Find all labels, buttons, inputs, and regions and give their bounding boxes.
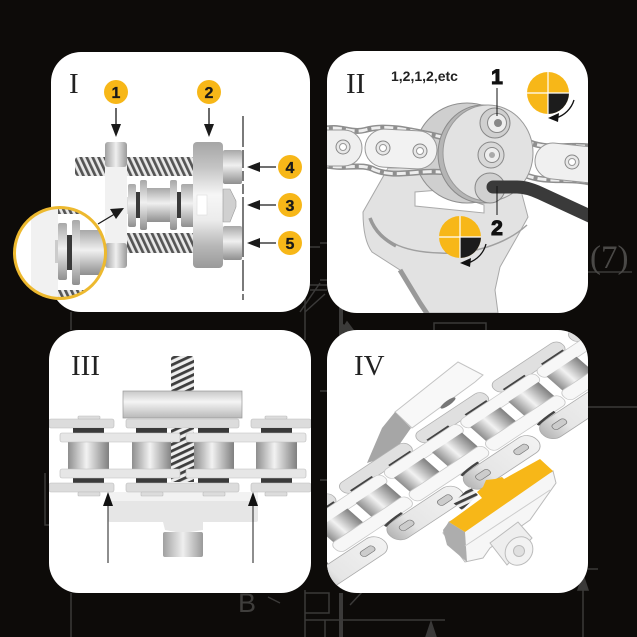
lower outer plates	[327, 392, 588, 586]
upper bolt	[171, 356, 194, 392]
tool disc	[438, 105, 533, 203]
faint label: (7): (7)	[590, 240, 628, 276]
chain	[327, 332, 588, 586]
yellow face	[449, 459, 553, 532]
thread visible	[453, 487, 478, 510]
panel: step I	[51, 52, 310, 312]
badge 1: 1	[112, 85, 121, 102]
panel: step IV	[327, 330, 588, 593]
numeral I: I	[69, 68, 79, 100]
badge 1	[104, 80, 128, 104]
socket bolts	[475, 108, 510, 203]
panel: step II	[327, 51, 588, 313]
badge 2: 2	[205, 85, 214, 102]
centre thread	[171, 428, 194, 482]
wrench	[363, 168, 528, 313]
top disc	[123, 391, 242, 418]
rollers	[318, 357, 592, 542]
badge 5: 5	[286, 236, 295, 253]
bolt label 1	[491, 66, 503, 116]
arrows	[103, 492, 258, 563]
flange 2	[193, 142, 223, 268]
badge 4	[278, 155, 302, 179]
back clamp	[418, 102, 482, 204]
pressing plate	[367, 362, 483, 463]
threaded rods	[75, 157, 195, 253]
badge 3	[278, 193, 302, 217]
dark crescents	[313, 350, 563, 516]
numeral IV: IV	[354, 350, 385, 382]
inner plates	[60, 433, 306, 478]
dashed reference line	[242, 116, 244, 300]
anvil block	[443, 459, 556, 571]
magnifier callout	[14, 207, 110, 300]
center spacer assembly	[127, 180, 196, 230]
wrench jaw opening	[415, 190, 484, 213]
bolt label 2	[491, 186, 503, 240]
nut 1	[105, 142, 127, 268]
faint label: B: B	[238, 588, 256, 618]
chain left	[300, 128, 442, 174]
upper outer plates	[327, 332, 582, 506]
dark bushings	[73, 428, 292, 483]
hex key	[493, 187, 592, 217]
dark crescents lower	[327, 410, 556, 564]
quarter-turn icon upper	[527, 72, 574, 122]
sequence label: 1,2,1,2,etc	[391, 68, 458, 84]
outer plates top	[49, 416, 311, 428]
pins	[360, 418, 568, 557]
badge 4: 4	[286, 160, 295, 177]
panel: step III	[49, 330, 311, 593]
caps and centre bolt	[223, 150, 242, 260]
numeral III: III	[71, 350, 100, 382]
badge 2	[197, 80, 221, 104]
badge 3: 3	[286, 198, 295, 215]
bolt label 2: 2	[491, 217, 503, 240]
bolt	[490, 522, 532, 565]
badge 5	[278, 231, 302, 255]
outer plates bottom	[49, 483, 311, 496]
rollers	[68, 442, 297, 469]
lower inner plates	[332, 373, 588, 552]
quarter-turn icon lower	[439, 216, 486, 267]
lower block	[108, 492, 258, 557]
bolt label 1: 1	[491, 66, 503, 89]
numeral II: II	[346, 68, 365, 100]
arrow markers	[98, 108, 276, 248]
upper inner plates	[327, 340, 587, 510]
chain right	[526, 140, 588, 186]
